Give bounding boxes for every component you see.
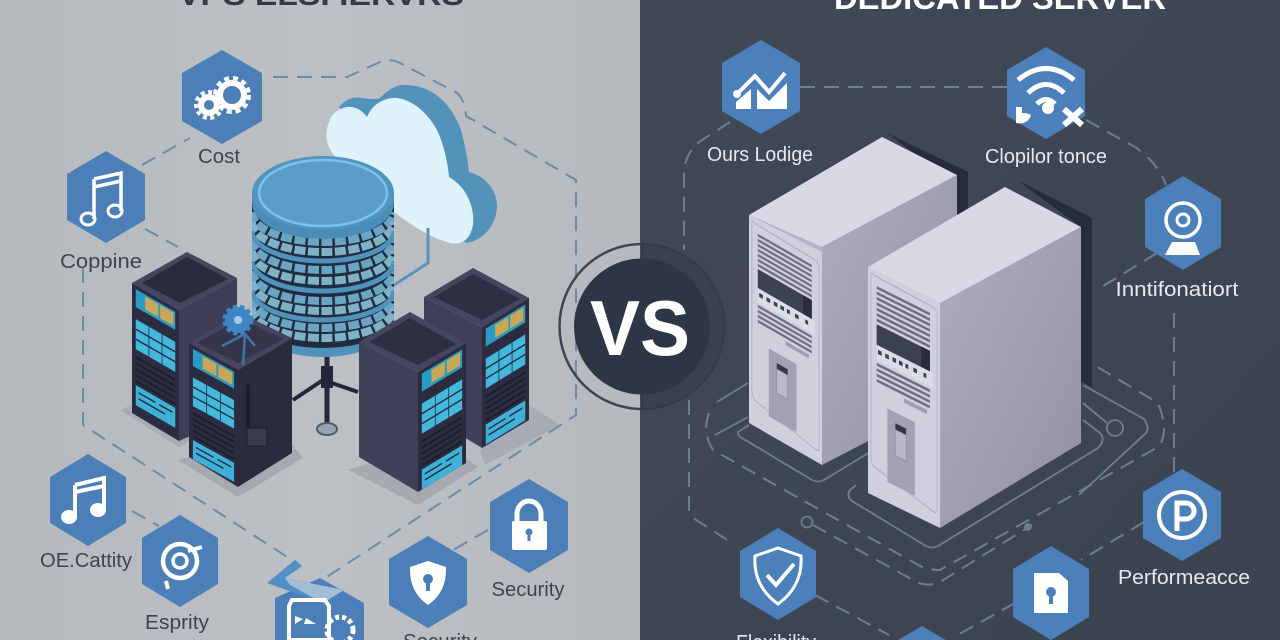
connector: cloud to database xyxy=(394,228,428,285)
icon: flexibility shield xyxy=(740,528,816,620)
icon: information xyxy=(1145,176,1221,270)
panel: right background xyxy=(640,0,1280,640)
illustration: central database cylinder xyxy=(252,156,394,357)
text: VS label: VS xyxy=(590,284,690,372)
icon: chart xyxy=(722,40,800,134)
icon: cost gears xyxy=(182,50,262,144)
illustration: cloud xyxy=(326,85,497,243)
panel: left background xyxy=(0,0,640,640)
label: information: Inntifonatiort xyxy=(1116,279,1239,301)
icon: capacity music note xyxy=(50,454,126,546)
icon: bottom box with gear xyxy=(267,560,364,640)
label: clopilor tonce: Clopilor tonce xyxy=(985,146,1107,168)
icon: tag lock xyxy=(1013,546,1089,640)
icon: performance xyxy=(1143,469,1221,561)
illustration: rack back left xyxy=(120,252,237,447)
icon: wifi xyxy=(1007,47,1085,139)
icon: coppine music xyxy=(67,151,145,243)
label: cost: Cost xyxy=(198,146,240,168)
label: security: Security xyxy=(492,579,564,601)
connector: left dashed network xyxy=(83,60,576,578)
illustration: rack front left xyxy=(178,313,303,497)
icon: blue gear on rack xyxy=(222,307,255,365)
illustration: dedicated server 1 xyxy=(749,133,968,465)
illustration: tripod stand xyxy=(293,357,358,435)
icon: security lock xyxy=(490,479,568,573)
icon: esprity target xyxy=(142,515,218,607)
badge: VS xyxy=(560,244,724,409)
label: coppine: Coppine xyxy=(60,251,142,273)
label: performance: Performeacce xyxy=(1118,567,1250,589)
label: ours lodige: Ours Lodige xyxy=(707,144,813,166)
label: capacity: OE.Cattity xyxy=(40,550,132,572)
connector: right dashed network xyxy=(684,87,1174,637)
circuit traces: right panel floor xyxy=(715,383,1148,548)
label: esprity: Esprity xyxy=(145,612,209,634)
illustration: rack back right xyxy=(424,268,560,465)
illustration: dedicated server 2 xyxy=(868,180,1092,528)
illustration: rack front right xyxy=(348,312,478,505)
icon: security shield xyxy=(389,536,467,628)
icon: bottom hexagon xyxy=(883,626,961,640)
